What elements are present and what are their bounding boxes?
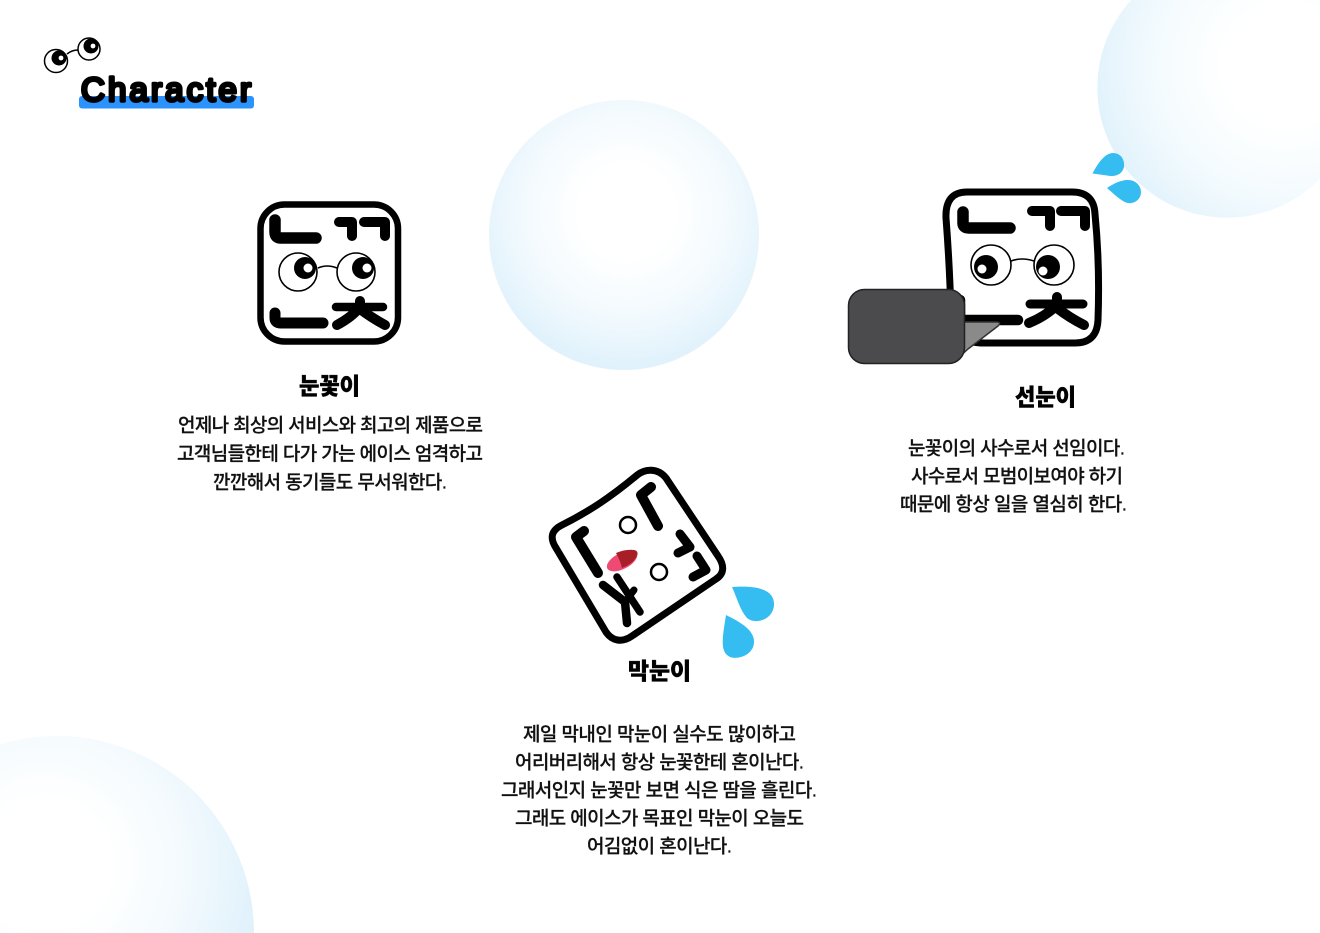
section title: Character — [44, 38, 254, 108]
title text: Character — [81, 71, 251, 108]
description: 선눈이: 사수로서 모범이보여야 하기 — [911, 466, 1123, 488]
description: 막눈이: 어김없이 혼이난다. — [587, 836, 732, 858]
name: 선눈이: 선눈이 — [1015, 384, 1076, 410]
bottom consonants — [960, 297, 1084, 325]
character: 눈꽃이 — [260, 204, 398, 342]
top consonants — [963, 211, 1085, 228]
glasses and eyes — [279, 253, 375, 291]
description: 눈꽃이: 언제나 최상의 서비스와 최고의 제품으로 — [178, 415, 483, 437]
sweat drops — [723, 587, 774, 658]
icon: googly eyes — [44, 38, 100, 72]
description: 선눈이 — [900, 438, 1127, 516]
face outline — [946, 192, 1099, 343]
name: 막눈이: 막눈이 — [628, 658, 691, 684]
name: 눈꽃이: 눈꽃이 — [299, 373, 360, 399]
dark sticky note — [848, 290, 964, 364]
top consonants — [275, 220, 385, 238]
sweat drops — [1092, 153, 1141, 203]
description: 눈꽃이: 고객님들한테 다가 가는 에이스 엄격하고 — [177, 443, 483, 465]
description: 막눈이: 제일 막내인 막눈이 실수도 많이하고 — [523, 724, 796, 746]
character: 막눈이 — [552, 470, 774, 658]
bottom consonants — [275, 301, 385, 325]
sticky note fold — [954, 322, 1000, 362]
description: 막눈이: 그래서인지 눈꽃만 보면 식은 땀을 흘린다. — [501, 780, 817, 802]
consonants — [576, 487, 706, 623]
tongue — [604, 546, 640, 576]
glasses and eyes — [971, 245, 1074, 285]
description: 막눈이: 어리버리해서 항상 눈꽃한테 혼이난다. — [515, 752, 804, 774]
title highlight bar — [79, 96, 254, 108]
eyes — [620, 517, 636, 533]
description: 막눈이: 그래도 에이스가 목표인 막눈이 오늘도 — [515, 808, 804, 830]
tilted face outline — [552, 470, 723, 640]
description: 막눈이 — [501, 724, 817, 858]
face outline — [260, 204, 398, 342]
background circle: top right — [1097, 0, 1320, 218]
description: 선눈이: 눈꽃이의 사수로서 선임이다. — [908, 438, 1125, 460]
description: 눈꽃이: 깐깐해서 동기들도 무서워한다. — [213, 472, 447, 494]
background circle: center bubble — [489, 100, 759, 370]
description: 선눈이: 때문에 항상 일을 열심히 한다. — [900, 494, 1127, 516]
description: 눈꽃이 — [177, 415, 483, 494]
background circle: bottom left — [0, 736, 254, 933]
character: 선눈이 — [848, 153, 1141, 364]
